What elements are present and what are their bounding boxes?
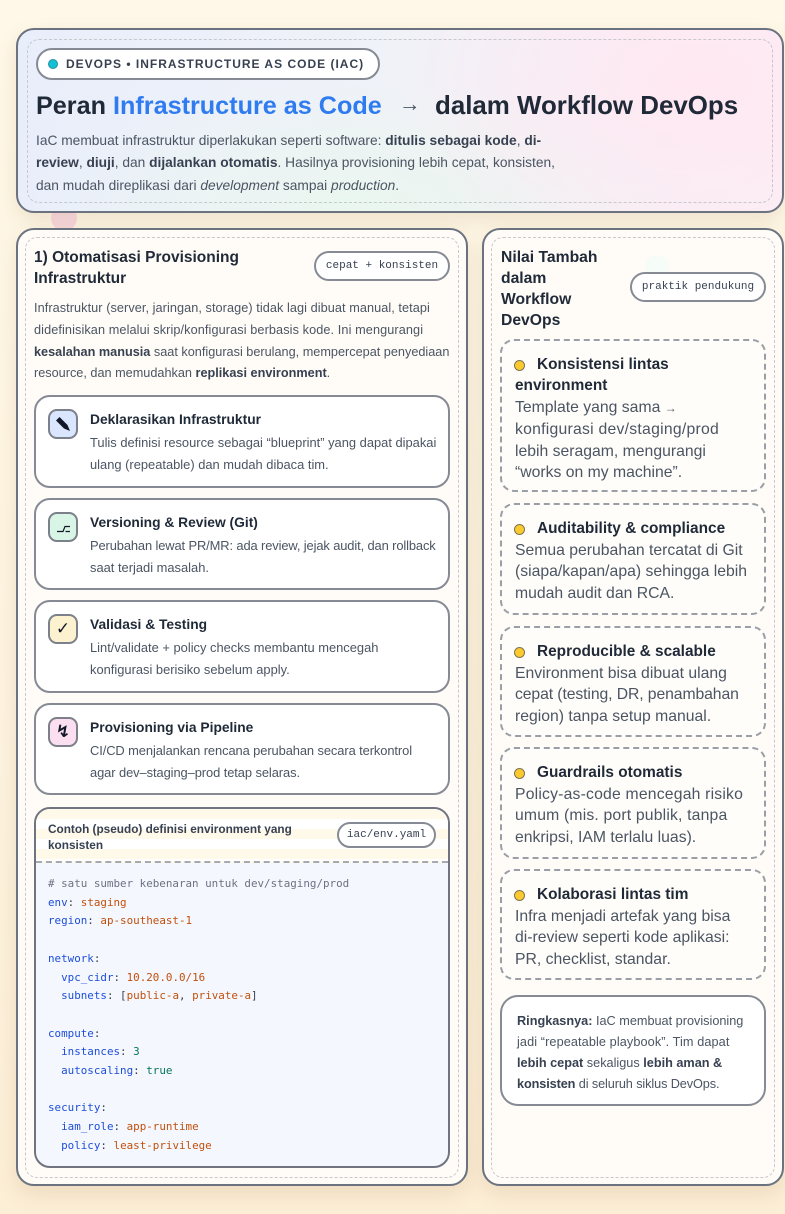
- code block: [34, 807, 450, 1168]
- card text: saat terjadi masalah.: [90, 560, 209, 575]
- card title: [515, 356, 669, 394]
- section heading: 1) Otomatisasi Provisioning: [34, 249, 239, 266]
- card text: [515, 786, 743, 846]
- card: auditability: [500, 503, 766, 615]
- card: pipeline: [34, 703, 450, 795]
- card text: [515, 908, 730, 968]
- decorative blob: pink: [51, 205, 77, 231]
- card title: Versioning & Review (Git): [90, 515, 258, 530]
- intro text: kesalahan manusia saat konfigurasi berulang, mempercepat penyediaan: [34, 345, 449, 359]
- card title: Auditability & compliance: [537, 520, 725, 537]
- tag: filename: [337, 822, 436, 848]
- tag: praktik pendukung: [630, 272, 766, 302]
- panel: provisioning: [16, 228, 468, 1186]
- description: dan mudah direplikasi dari development sampai production.: [36, 178, 399, 193]
- card text: Policy-as-code mencegah risiko: [515, 786, 743, 803]
- card text: Template yang sama →: [515, 399, 677, 416]
- card text: Environment bisa dibuat ulang: [515, 665, 727, 682]
- card: versioning: [34, 498, 450, 590]
- icon: pencil: [48, 409, 78, 439]
- icon: git branch: [48, 512, 78, 542]
- callout text: lebih cepat sekaligus lebih aman &: [517, 1056, 722, 1070]
- card title: Provisioning via Pipeline: [90, 720, 253, 735]
- intro text: [34, 301, 449, 380]
- card title: Konsistensi lintas: [537, 356, 669, 373]
- card title: Guardrails otomatis: [537, 764, 682, 781]
- card: deklarasikan: [34, 395, 450, 488]
- callout text: Ringkasnya: IaC membuat provisioning: [517, 1014, 743, 1028]
- card text: region) tanpa setup manual.: [515, 708, 711, 725]
- card title: Validasi & Testing: [90, 617, 207, 632]
- decorative blob: teal: [645, 255, 669, 279]
- card text: konfigurasi dev/staging/prod: [515, 421, 719, 438]
- card: reproducible: [500, 626, 766, 737]
- tag: praktik pendukung: praktik pendukung: [642, 281, 754, 293]
- card title: Kolaborasi lintas tim: [537, 886, 688, 903]
- card text: [90, 743, 412, 780]
- card title: environment: [515, 377, 607, 394]
- description: IaC membuat infrastruktur diperlakukan seperti software: ditulis sebagai kode, di-: [36, 132, 541, 148]
- card text: lebih seragam, mengurangi: [515, 443, 706, 460]
- description: [36, 132, 555, 193]
- card text: umum (mis. port publik, tanpa: [515, 807, 727, 824]
- section heading: [34, 249, 239, 287]
- intro text: resource, dan memudahkan replikasi environment.: [34, 366, 330, 380]
- card text: Lint/validate + policy checks membantu mencegah: [90, 640, 378, 655]
- title: [36, 92, 738, 120]
- section heading: Nilai Tambah: [501, 248, 597, 266]
- card: kolaborasi: [500, 869, 766, 980]
- icon: lightning: [48, 717, 78, 747]
- card text: agar dev–staging–prod tetap selaras.: [90, 765, 300, 780]
- card text: (siapa/kapan/apa) sehingga lebih: [515, 563, 747, 580]
- card: konsistensi: [500, 339, 766, 492]
- tag: cepat + konsisten: [314, 251, 450, 281]
- tag: filename: iac/env.yaml: [347, 829, 426, 841]
- callout: ringkasnya: [500, 995, 766, 1106]
- code header: [36, 809, 448, 863]
- section heading: dalam: [501, 270, 546, 286]
- callout text: konsisten di seluruh siklus DevOps.: [517, 1076, 719, 1090]
- card text: [90, 435, 436, 472]
- card text: ulang (repeatable) dan mudah dibaca tim.: [90, 457, 329, 472]
- card text: mudah audit dan RCA.: [515, 585, 674, 602]
- card text: [515, 665, 739, 725]
- section heading: [501, 248, 597, 328]
- card text: [515, 542, 747, 602]
- icon: lightning: ↯: [56, 722, 70, 742]
- title: →: [399, 92, 420, 116]
- tag: cepat + konsisten: cepat + konsisten: [326, 260, 438, 272]
- card text: Infra menjadi artefak yang bisa: [515, 908, 730, 925]
- bullet: [514, 524, 525, 535]
- card text: Semua perubahan tercatat di Git: [515, 542, 743, 559]
- code title: [48, 822, 292, 852]
- card text: konfigurasi berisiko sebelum apply.: [90, 662, 290, 677]
- badge: category: [36, 48, 380, 80]
- intro text: Infrastruktur (server, jaringan, storage) tidak lagi dibuat manual, tetapi: [34, 301, 430, 315]
- intro text: didefinisikan melalui skrip/konfigurasi berbasis kode. Ini mengurangi: [34, 323, 423, 337]
- card: guardrails: [500, 747, 766, 859]
- badge label: DEVOPS • INFRASTRUCTURE AS CODE (IAC): [66, 57, 364, 71]
- callout text: jadi “repeatable playbook”. Tim dapat: [517, 1034, 729, 1048]
- card text: Tulis definisi resource sebagai “blueprint” yang dapat dipakai: [90, 435, 436, 450]
- panel: nilai tambah: [482, 228, 784, 1186]
- card: validasi: [34, 600, 450, 693]
- title: dalam Workflow DevOps: [435, 92, 738, 120]
- panel: header: [16, 28, 784, 213]
- card text: “works on my machine”.: [515, 464, 682, 481]
- description: review, diuji, dan dijalankan otomatis. Hasilnya provisioning lebih cepat, konsisten,: [36, 155, 555, 170]
- bullet: [514, 647, 525, 658]
- code title: Contoh (pseudo) definisi environment yang: [48, 822, 292, 836]
- card text: Perubahan lewat PR/MR: ada review, jejak audit, dan rollback: [90, 538, 436, 553]
- card text: [90, 538, 436, 575]
- icon: teal dot: [48, 59, 58, 69]
- code title: konsisten: [48, 838, 103, 852]
- card text: enkripsi, IAM terlalu luas).: [515, 829, 696, 846]
- code listing: # satu sumber kebenaran untuk dev/staging/prod env: staging region: ap-southeast-1 network: vpc_cidr: 10.20.0.0/16 subnets: [public-a, private-a] compute: instances: 3 autoscaling: true security: iam_role: app-runtime policy: least-privilege: [48, 877, 349, 1152]
- callout text: [516, 1014, 743, 1090]
- card text: cepat (testing, DR, penambahan: [515, 686, 739, 703]
- card text: CI/CD menjalankan rencana perubahan secara terkontrol: [90, 743, 412, 758]
- section heading: Workflow: [501, 290, 571, 308]
- card text: [515, 399, 719, 481]
- card text: di-review seperti kode aplikasi:: [515, 929, 729, 946]
- card text: [90, 640, 378, 677]
- card text: PR, checklist, standar.: [515, 951, 671, 968]
- title: Peran Infrastructure as Code: [36, 92, 382, 120]
- bullet: [514, 890, 525, 901]
- bullet: [514, 360, 525, 371]
- section heading: Infrastruktur: [34, 270, 126, 287]
- card title: Deklarasikan Infrastruktur: [90, 412, 261, 427]
- card title: Reproducible & scalable: [537, 643, 716, 660]
- bullet: [514, 768, 525, 779]
- icon: check: ✓: [56, 619, 70, 639]
- section heading: DevOps: [501, 312, 560, 328]
- icon: check: [48, 614, 78, 644]
